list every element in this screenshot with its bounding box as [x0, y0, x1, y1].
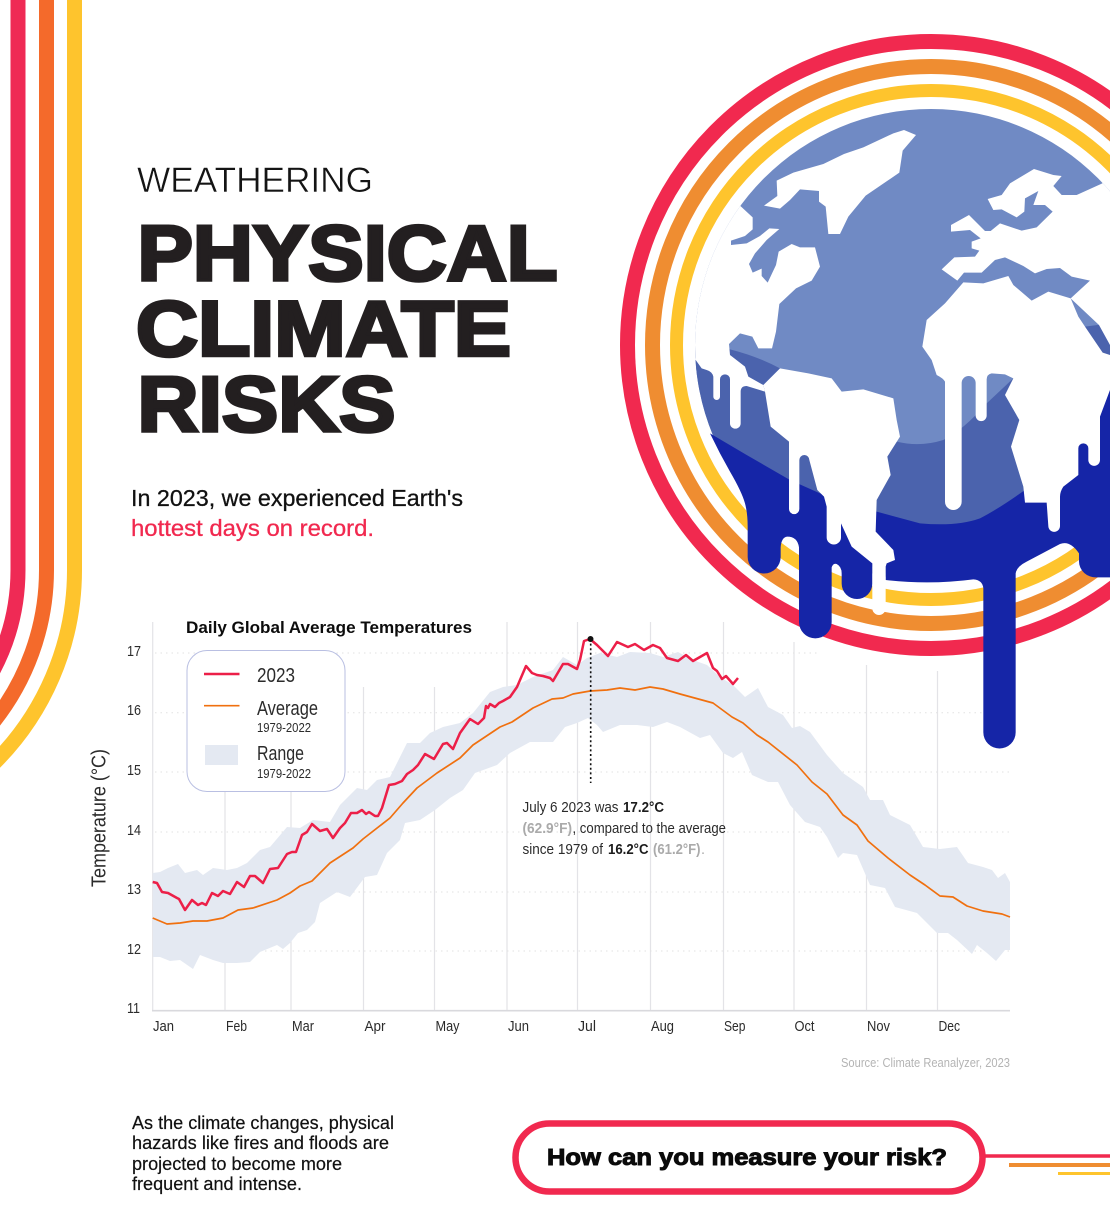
continent: south america with long drip [763, 368, 900, 615]
legend: 2023 [204, 665, 295, 687]
legend: average: 1979-2022 [257, 720, 311, 735]
body text: As the climate changes, physical [132, 1113, 394, 1133]
legend: average [204, 698, 318, 735]
2023 line [153, 639, 738, 910]
annotation text: , compared to the average [572, 821, 726, 837]
globe ocean: light layer [695, 109, 1110, 581]
continent: africa [922, 276, 1110, 532]
body text [132, 1113, 394, 1194]
x axis [152, 1010, 1010, 1012]
x axis month labels: Apr [364, 1018, 386, 1035]
title block [136, 161, 558, 448]
subtitle [131, 485, 463, 541]
x axis month labels: Aug [651, 1018, 674, 1035]
subtitle: hottest days on record. [131, 515, 374, 541]
vertical month grid lines [153, 622, 937, 1010]
call to action pill: How can you measure your risk? [547, 1144, 947, 1170]
y axis labels: 15 [127, 762, 141, 779]
legend [187, 650, 345, 792]
annotation text: . [701, 842, 705, 858]
legend: range [205, 743, 311, 781]
x axis month labels: Jun [508, 1018, 529, 1035]
title: physical climate risks [136, 209, 558, 448]
y axis labels: 13 [127, 881, 141, 898]
legend: 2023: 2023 [257, 665, 295, 687]
range band 1979-2022 [153, 652, 1010, 969]
globe ocean: mid layer [660, 322, 1110, 573]
chart title: Daily Global Average Temperatures [186, 618, 472, 637]
x axis month labels: Mar [292, 1018, 314, 1035]
continent: eurasia [942, 169, 1110, 345]
title: physical climate risks: CLIMATE [136, 285, 511, 373]
globe ocean: dark melting layer with drips [710, 373, 1110, 748]
annotation text [522, 800, 726, 858]
connector stripes [985, 1156, 1110, 1174]
horizontal dotted grid lines [155, 653, 1010, 951]
source note: Source: Climate Reanalyzer, 2023 [841, 1055, 1010, 1070]
body text: projected to become more [132, 1154, 342, 1174]
continent: north america [695, 206, 820, 429]
melting globe illustration [628, 42, 1110, 748]
x axis month labels: Oct [794, 1018, 815, 1035]
continents clipped to globe [695, 130, 1110, 532]
body text: frequent and intense. [132, 1174, 302, 1194]
legend: range: 1979-2022 [257, 766, 311, 781]
annotation text: 16.2°C [608, 842, 649, 858]
legend: range: Range [257, 743, 304, 765]
x axis month labels: Jul [578, 1018, 596, 1035]
y axis labels: 16 [127, 702, 141, 719]
x axis month labels [153, 1018, 960, 1035]
x axis month labels: Sep [724, 1018, 746, 1035]
average line [153, 687, 1010, 924]
x axis month labels: Dec [938, 1018, 960, 1035]
y axis labels: 17 [127, 643, 141, 660]
annotation text: since 1979 of [522, 842, 604, 858]
call to action pill [516, 1124, 1110, 1192]
body text: hazards like fires and floods are [132, 1133, 389, 1153]
left decorative stripes [0, 0, 74, 767]
x axis month labels: May [436, 1018, 460, 1035]
subtitle: In 2023, we experienced Earth's [131, 485, 463, 511]
continent: greenland [764, 130, 916, 234]
peak marker and dotted leader [588, 636, 594, 783]
concentric rings [628, 42, 1110, 648]
y axis labels [127, 643, 141, 1017]
y axis labels: 11 [127, 1000, 140, 1017]
title: physical climate risks: PHYSICAL [138, 209, 558, 297]
x axis month labels: Nov [867, 1018, 890, 1035]
annotation text: 17.2°C [623, 800, 664, 816]
annotation text: (61.2°F) [653, 842, 701, 858]
legend: average: Average [257, 698, 318, 720]
y axis labels: 14 [127, 822, 141, 839]
y axis title: Temperature (°C) [88, 749, 110, 887]
annotation text: July 6 2023 was [522, 800, 618, 816]
x axis month labels: Feb [226, 1018, 247, 1035]
annotation text: (62.9°F) [522, 821, 572, 837]
line chart: daily global average temperatures [88, 618, 1010, 1070]
y axis labels: 12 [127, 941, 141, 958]
x axis month labels: Jan [153, 1018, 174, 1035]
title: physical climate risks: RISKS [138, 360, 396, 448]
title: weathering: WEATHERING [137, 161, 373, 200]
